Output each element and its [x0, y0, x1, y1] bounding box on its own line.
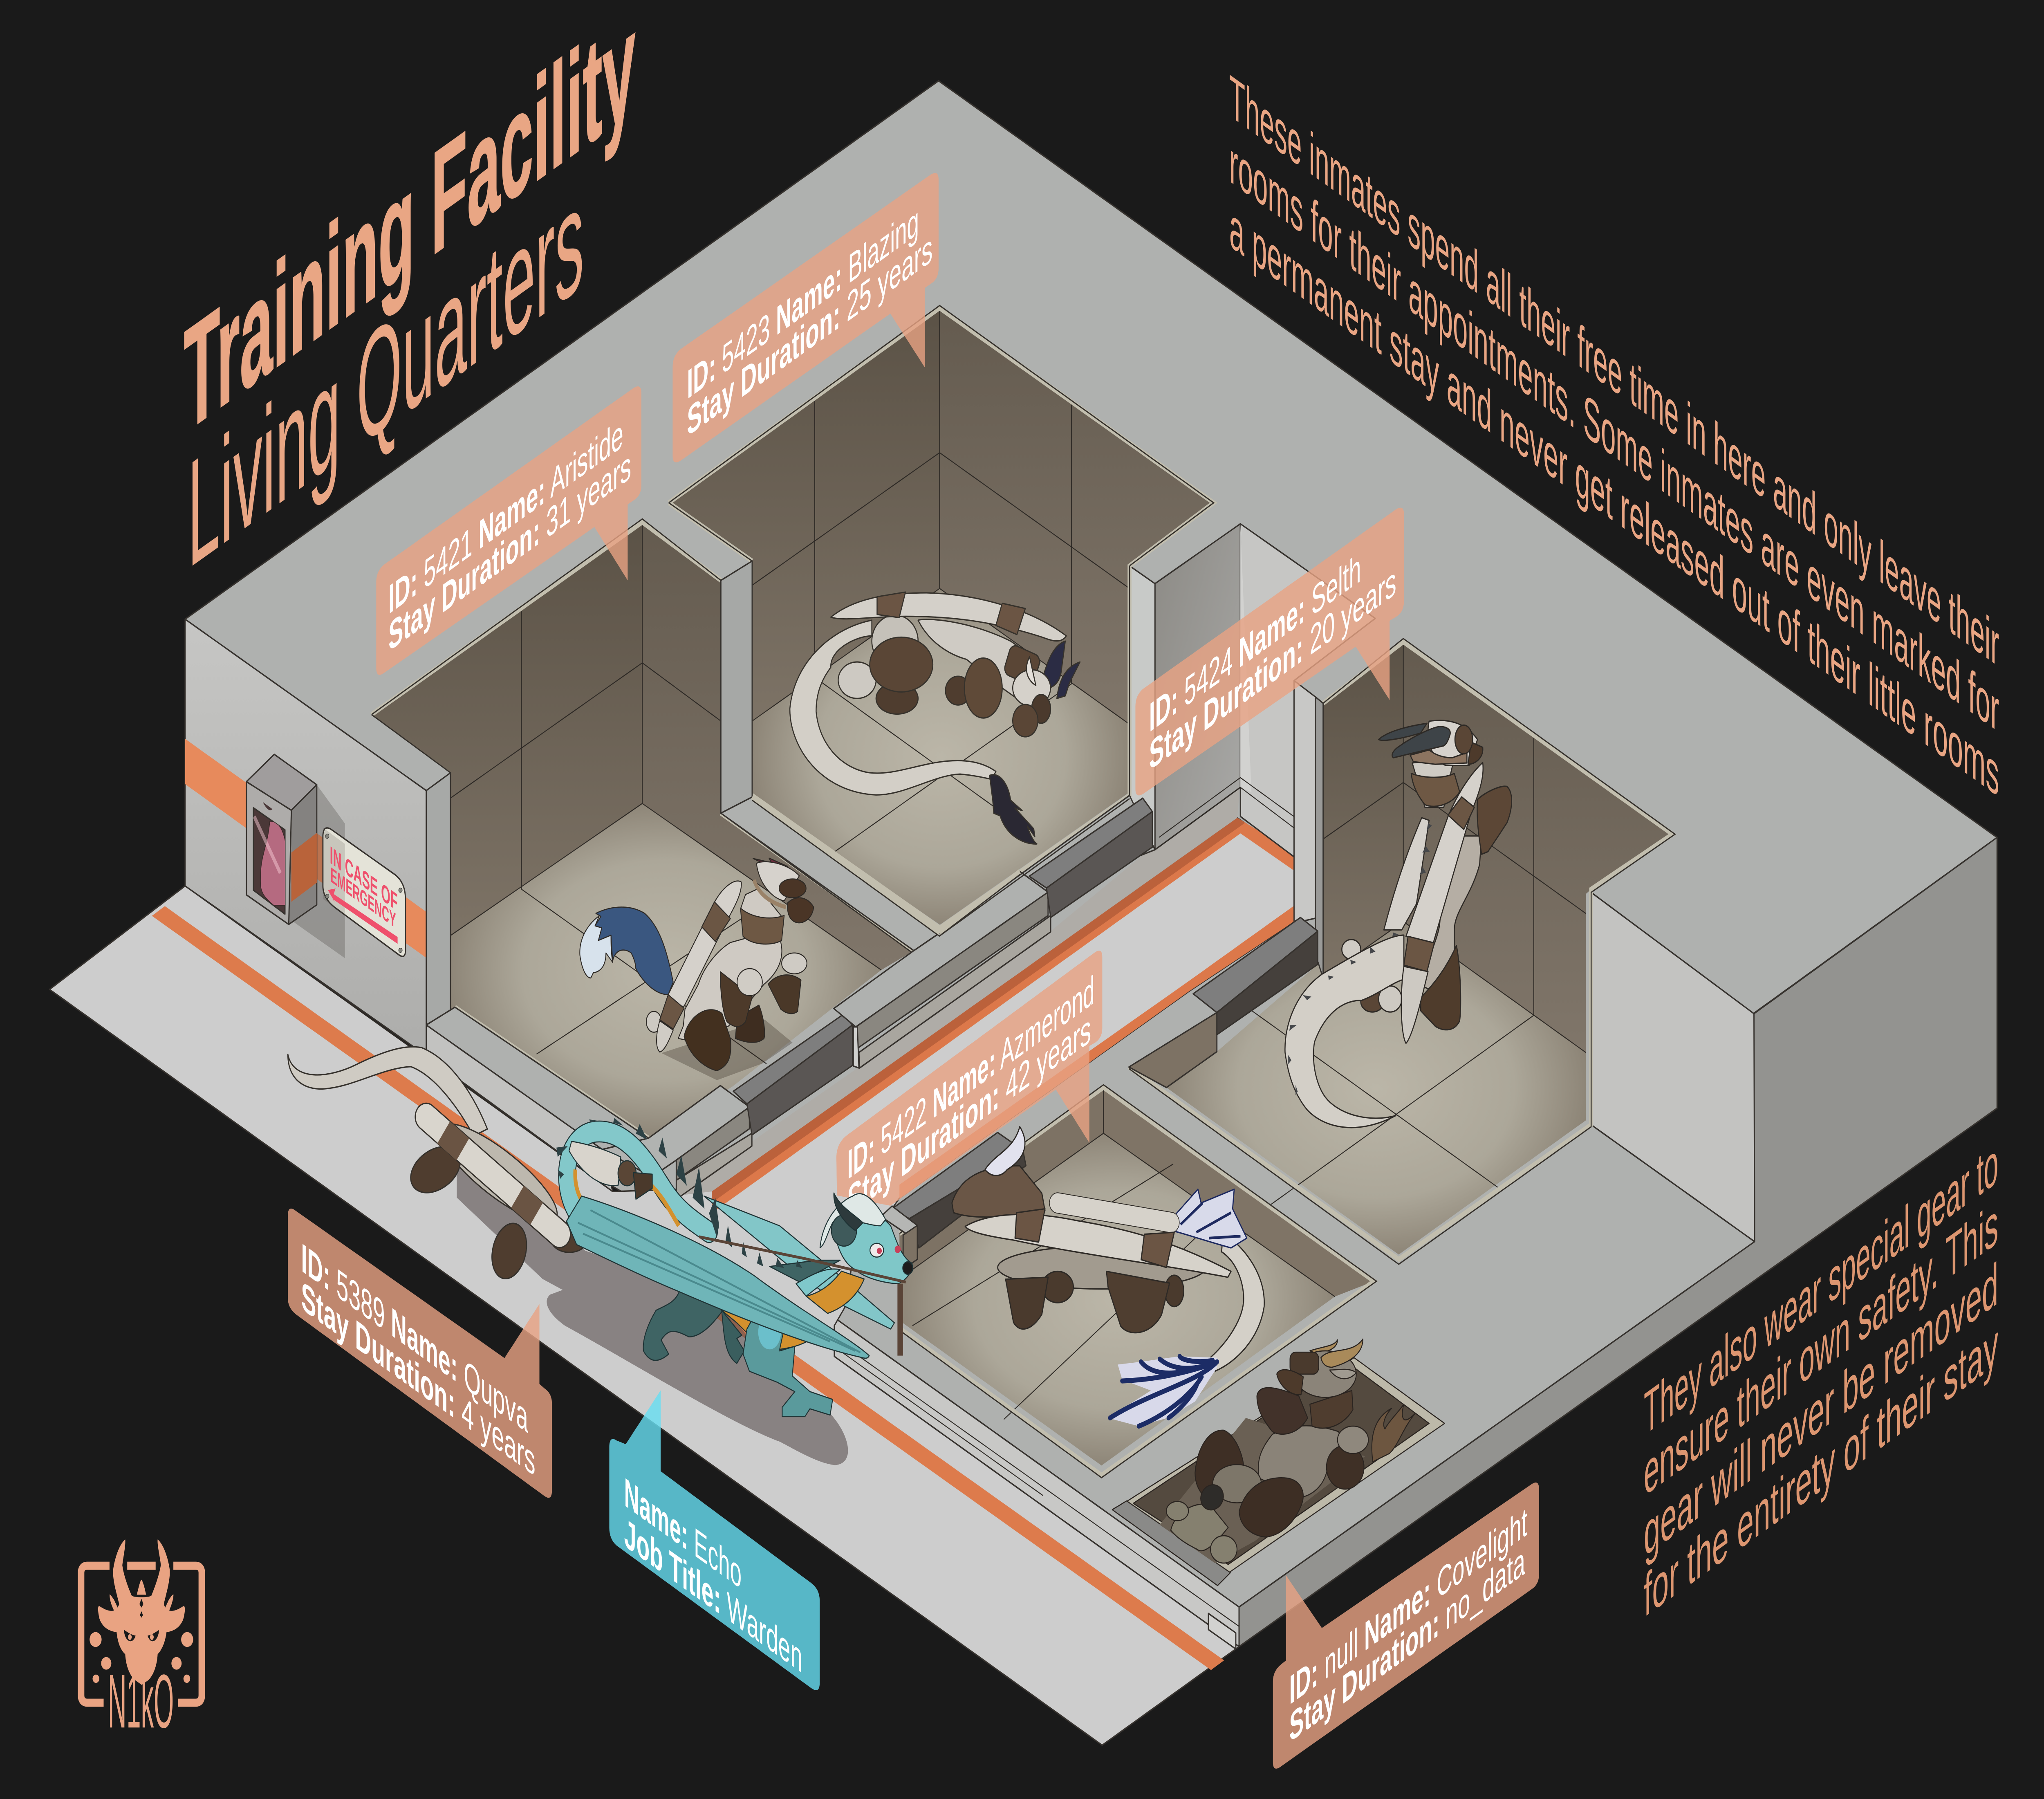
rear belly: [722, 1310, 755, 1335]
logo head: N1kO: [108, 1659, 174, 1744]
floor shadow: [661, 1020, 793, 1080]
creature: inmate 5389 pulled by leash: [288, 1047, 589, 1285]
bound inmate head on arch: [569, 1141, 621, 1186]
small feet: [1342, 940, 1361, 959]
room 5422: [899, 1085, 1376, 1478]
creature: inmate 5422 lying: [952, 1127, 1264, 1371]
alcove walls: [1130, 524, 1375, 857]
creature: inmate 5424 standing against wall: [1285, 720, 1512, 1128]
callout: 5422: Stay Duration: 42 years: [847, 1005, 1091, 1225]
blue tail: [595, 907, 673, 995]
body: [430, 1108, 567, 1238]
brown limb covers: [876, 683, 918, 714]
room 5424: [1129, 639, 1675, 1264]
null pit room with Covelight inmate: [1112, 1339, 1445, 1586]
pit beige rim: [1127, 1358, 1445, 1575]
cabinet shadow: [294, 785, 345, 958]
head: [1003, 644, 1041, 686]
back legs: [1042, 1272, 1074, 1303]
corridor floor: [49, 818, 1294, 1745]
head: [833, 1206, 912, 1284]
screws: [325, 834, 329, 839]
corridor north wall base: [671, 778, 1240, 1196]
neck wrap: [740, 908, 784, 944]
emergency sign: [323, 828, 406, 956]
callout: 5421: Stay Duration: 31 years: [388, 441, 631, 660]
left tube: [1384, 818, 1429, 930]
legs: [405, 1137, 466, 1202]
body: [678, 888, 782, 1041]
sign arrow: [328, 888, 398, 944]
creature: inmate 5421 sitting: [580, 858, 814, 1080]
logo: N1kO dragon head: [81, 1539, 202, 1744]
leash and strap: [699, 1237, 906, 1282]
covelight neck wrap: [1310, 1391, 1353, 1428]
tail: [790, 620, 996, 795]
brown lower legs: [1421, 946, 1461, 1030]
front low wall face: [834, 1318, 1239, 1646]
neck and wrap: [1412, 758, 1455, 808]
tail and spine spikes: [1288, 823, 1432, 1095]
front body and legs: [743, 1313, 833, 1417]
spikes: [556, 1118, 802, 1268]
dark neck and chest: [770, 1260, 840, 1282]
callout: Echo warden: [609, 1391, 820, 1690]
horns: [1040, 641, 1065, 688]
back wing: [704, 1196, 894, 1329]
corridor shadows under inmate 5389 and warden: [457, 1135, 848, 1465]
callout: 5423: Stay Duration: 25 years: [687, 224, 932, 445]
character: warden Echo: [556, 1118, 913, 1417]
creature: inmate 5423 curled: [790, 592, 1080, 844]
logo head: [90, 1539, 193, 1744]
top surface of the building: [185, 81, 1997, 1607]
stub face by room 5424: [1129, 1012, 1217, 1088]
callout: 5422: ID: 5422 Name: Azmerond: [847, 966, 1094, 1189]
sign text line 1: IN CASE OF: [330, 841, 397, 916]
door stub and dark door bar 1: [602, 1014, 852, 1199]
room 5421: [372, 519, 914, 1142]
neck arch: [567, 1131, 709, 1232]
white tail tip: [580, 916, 613, 978]
tail: [1210, 1232, 1264, 1371]
callout: null Covelight: Stay Duration: no_data: [1289, 1537, 1525, 1751]
right tube: [1406, 763, 1483, 943]
room 5423: [669, 305, 1214, 933]
small wall box: [1208, 1613, 1236, 1649]
head: [952, 1166, 1045, 1217]
door bar 4 and stub near room 5422: [881, 1133, 1026, 1269]
top fin: [1163, 1189, 1247, 1248]
back bound tube: [1058, 1203, 1171, 1223]
callout: 5389: Stay Duration: 4 years: [301, 1272, 536, 1485]
head and strap: [1428, 720, 1477, 765]
corridor orange stripe lower: [899, 906, 1294, 1198]
callout: null Covelight: ID: null Name: Covelight: [1289, 1498, 1527, 1714]
tail: [288, 1047, 487, 1136]
main corridor orange stripe: [152, 906, 1224, 1670]
right block light wall: [1591, 893, 1755, 1242]
emergency cabinet: [247, 754, 345, 958]
pit interior: [1133, 1362, 1429, 1564]
dark door bar 3: [1193, 917, 1318, 1035]
cabinet side: [289, 785, 317, 924]
callout: Echo warden: Job Title: Warden: [624, 1509, 802, 1682]
callout: 5423: ID: 5423 Name: Blazing: [687, 197, 919, 408]
cabinet window: [253, 808, 285, 914]
body and foot: [918, 619, 1040, 698]
tail tuft: [990, 775, 1037, 844]
tail: [1285, 935, 1404, 1128]
outer right wall: [1239, 837, 1997, 1646]
upper bound tube: [831, 593, 1066, 641]
callout: 5389: ID: 5389 Name: Qupva: [301, 1234, 528, 1442]
covelight head: [1294, 1351, 1356, 1397]
dark door bar 2: [1029, 798, 1152, 917]
bound arm tube: [668, 881, 742, 1006]
horns: [1378, 723, 1427, 740]
covelight body: [1258, 1426, 1343, 1497]
logo brackets: [81, 1566, 202, 1703]
front legs: [1006, 1277, 1048, 1329]
covelight horns: [1310, 1340, 1338, 1354]
pit grey side: [1112, 1501, 1230, 1586]
covelight limbs: [1257, 1388, 1308, 1434]
cabinet top: [247, 754, 317, 810]
cabinet front: [247, 782, 291, 924]
jamb between rooms 5421 and 5423: [721, 561, 752, 813]
brown limb covers: [735, 1005, 764, 1043]
brown upper leg: [1477, 786, 1512, 854]
covelight tail: [1372, 1404, 1415, 1462]
bound arm tube: [426, 1117, 560, 1234]
left wall with stripe: [185, 619, 648, 1191]
sign text line 2: EMERGENCY: [330, 863, 396, 933]
callout: 5421: ID: 5421 Name: Aristide: [388, 410, 623, 623]
body: [998, 1246, 1206, 1289]
head: [753, 858, 787, 868]
callout: Echo warden: Name: Echo: [624, 1469, 742, 1598]
inmate 5422 bottom fin: [1108, 1356, 1217, 1426]
pink object: [254, 817, 289, 905]
front bound tube: [965, 1214, 1231, 1277]
paws: [737, 969, 762, 996]
wall segment between doors: [721, 795, 1155, 1068]
callout: 5424: ID: 5424 Name: Selth: [1149, 544, 1361, 741]
baseboard lines: [185, 875, 1239, 1626]
back body: [1423, 836, 1481, 989]
corridor orange stripe upper: [712, 818, 1294, 1213]
main wing: [567, 1196, 869, 1358]
hind body: [643, 1284, 729, 1360]
callout: 5424: Stay Duration: 20 years: [1149, 557, 1396, 779]
